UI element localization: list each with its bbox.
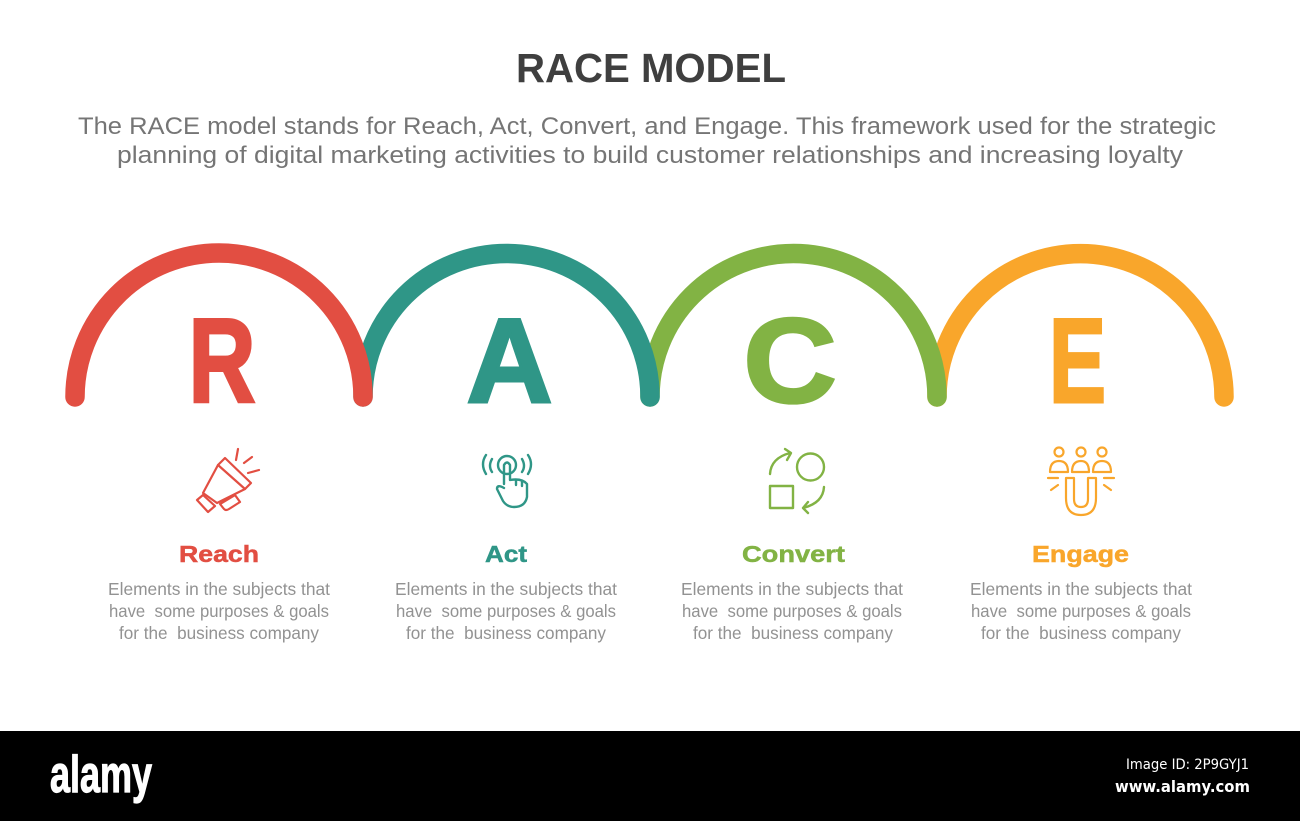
icon: people magnet <box>1048 448 1114 515</box>
text block: Engage: for the business company <box>981 623 1181 643</box>
text block: Act: Elements in the subjects that <box>395 579 617 599</box>
text block: Reach <box>108 579 330 643</box>
heading: Act: Act <box>485 541 527 567</box>
text block: Act: have some purposes & goals <box>396 601 616 621</box>
letter R: R <box>188 294 256 428</box>
arc: engage <box>937 254 1224 397</box>
arc: act <box>363 254 650 397</box>
icon: touch hand <box>483 455 531 507</box>
text block: Convert: Elements in the subjects that <box>681 579 903 599</box>
title: RACE MODEL <box>516 45 786 91</box>
footer bar <box>0 731 1300 821</box>
letter E: E <box>1049 294 1106 428</box>
text block: Engage <box>970 579 1192 643</box>
text block: Act <box>395 579 617 643</box>
arc chain <box>75 253 1224 397</box>
text block: Convert: for the business company <box>693 623 893 643</box>
text block: Reach: have some purposes & goals <box>109 601 329 621</box>
icon: convert shapes <box>770 449 824 513</box>
text block: Convert: have some purposes & goals <box>682 601 902 621</box>
description text <box>78 113 1216 169</box>
alamy logo: alamy <box>50 746 152 804</box>
heading: Convert: Convert <box>742 541 845 567</box>
text block: Reach: Elements in the subjects that <box>108 579 330 599</box>
letter C: C <box>744 294 836 428</box>
text block: Engage: Elements in the subjects that <box>970 579 1192 599</box>
text block: Engage: have some purposes & goals <box>971 601 1191 621</box>
heading: Reach: Reach <box>179 541 259 567</box>
website: www.alamy.com <box>1115 777 1250 796</box>
text block: Act: for the business company <box>406 623 606 643</box>
image id: Image ID: 2P9GYJ1 <box>1126 757 1249 773</box>
letter A: A <box>466 294 552 428</box>
text block: Convert <box>681 579 903 643</box>
text block: Reach: for the business company <box>119 623 319 643</box>
heading: Engage: Engage <box>1032 541 1129 567</box>
big letters <box>188 294 1106 428</box>
description text: planning of digital marketing activities to build customer relationships and increasing loyalty <box>117 142 1183 169</box>
arc: convert <box>650 254 937 397</box>
description text: The RACE model stands for Reach, Act, Convert, and Engage. This framework used for the strategic <box>78 113 1216 140</box>
icon: megaphone <box>197 449 259 512</box>
arc: reach <box>75 253 363 397</box>
